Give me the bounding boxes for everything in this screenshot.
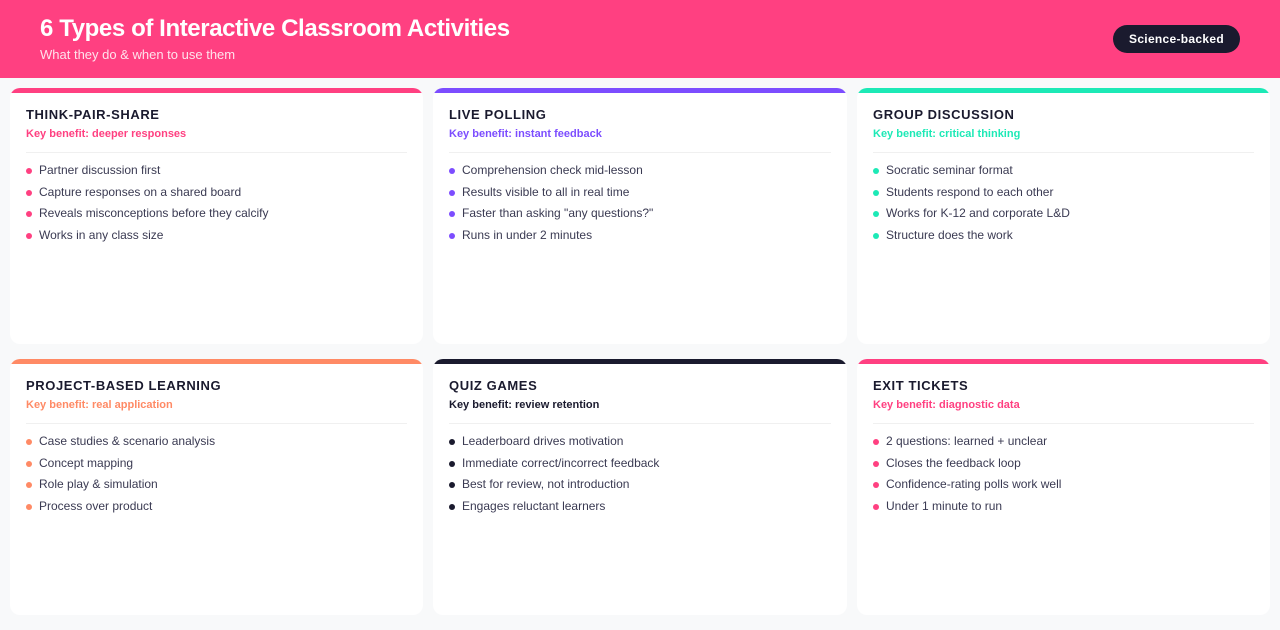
panel: think-pair-share [10,88,423,344]
panel: live polling: Comprehension check mid-lesson [462,163,643,177]
key benefit: Key benefit: instant feedback [449,128,602,140]
panel: think-pair-share: Reveals misconceptions before they calcify [39,206,268,220]
heading: EXIT TICKETS [873,378,968,393]
panel: exit tickets: Under 1 minute to run [886,499,1002,513]
panel: group discussion: Structure does the work [886,228,1013,242]
key benefit: Key benefit: deeper responses [26,128,186,140]
panel: project-based learning: Process over product [39,499,152,513]
heading: GROUP DISCUSSION [873,107,1015,122]
badge: science-backed [1113,25,1240,53]
panel: live polling [433,88,847,344]
panel: exit tickets: Confidence-rating polls work well [886,477,1061,491]
panel: live polling: Runs in under 2 minutes [462,228,592,242]
heading: QUIZ GAMES [449,378,537,393]
key benefit: Key benefit: review retention [449,399,599,411]
header banner [0,0,1280,78]
panel: think-pair-share: Partner discussion first [39,163,160,177]
panel: group discussion: Students respond to each other [886,185,1053,199]
heading: THINK-PAIR-SHARE [26,107,160,122]
panel: live polling: Faster than asking "any questions?" [462,206,653,220]
bullet list [449,163,653,242]
panel: quiz games [433,359,847,615]
heading: PROJECT-BASED LEARNING [26,378,221,393]
key benefit: Key benefit: diagnostic data [873,399,1020,411]
panel: live polling: Results visible to all in real time [462,185,629,199]
panel: quiz games: Leaderboard drives motivation [462,434,623,448]
panel: group discussion [857,88,1270,344]
panel: think-pair-share: Capture responses on a shared board [39,185,241,199]
panel: think-pair-share: Works in any class size [39,228,163,242]
heading: LIVE POLLING [449,107,546,122]
bullet list [26,434,215,513]
panel: quiz games: Engages reluctant learners [462,499,605,513]
key benefit: Key benefit: critical thinking [873,128,1020,140]
panel: group discussion: Socratic seminar format [886,163,1013,177]
panel: exit tickets: 2 questions: learned + unclear [886,434,1047,448]
panel: project-based learning: Case studies & scenario analysis [39,434,215,448]
bullet list [26,163,268,242]
panel: project-based learning [10,359,423,615]
key benefit: Key benefit: real application [26,399,173,411]
bullet list [873,434,1061,513]
bullet list [449,434,660,513]
badge: science-backed: Science-backed [1129,32,1224,46]
panel: exit tickets [857,359,1270,615]
panel: quiz games: Immediate correct/incorrect feedback [462,456,659,470]
panel: project-based learning: Role play & simulation [39,477,158,491]
bullet list [873,163,1070,242]
panel: group discussion: Works for K-12 and corporate L&D [886,206,1070,220]
panel: exit tickets: Closes the feedback loop [886,456,1021,470]
title: 6 Types of Interactive Classroom Activities [40,15,510,42]
panel: quiz games: Best for review, not introduction [462,477,629,491]
subtitle: What they do & when to use them [40,47,235,62]
panel: project-based learning: Concept mapping [39,456,133,470]
